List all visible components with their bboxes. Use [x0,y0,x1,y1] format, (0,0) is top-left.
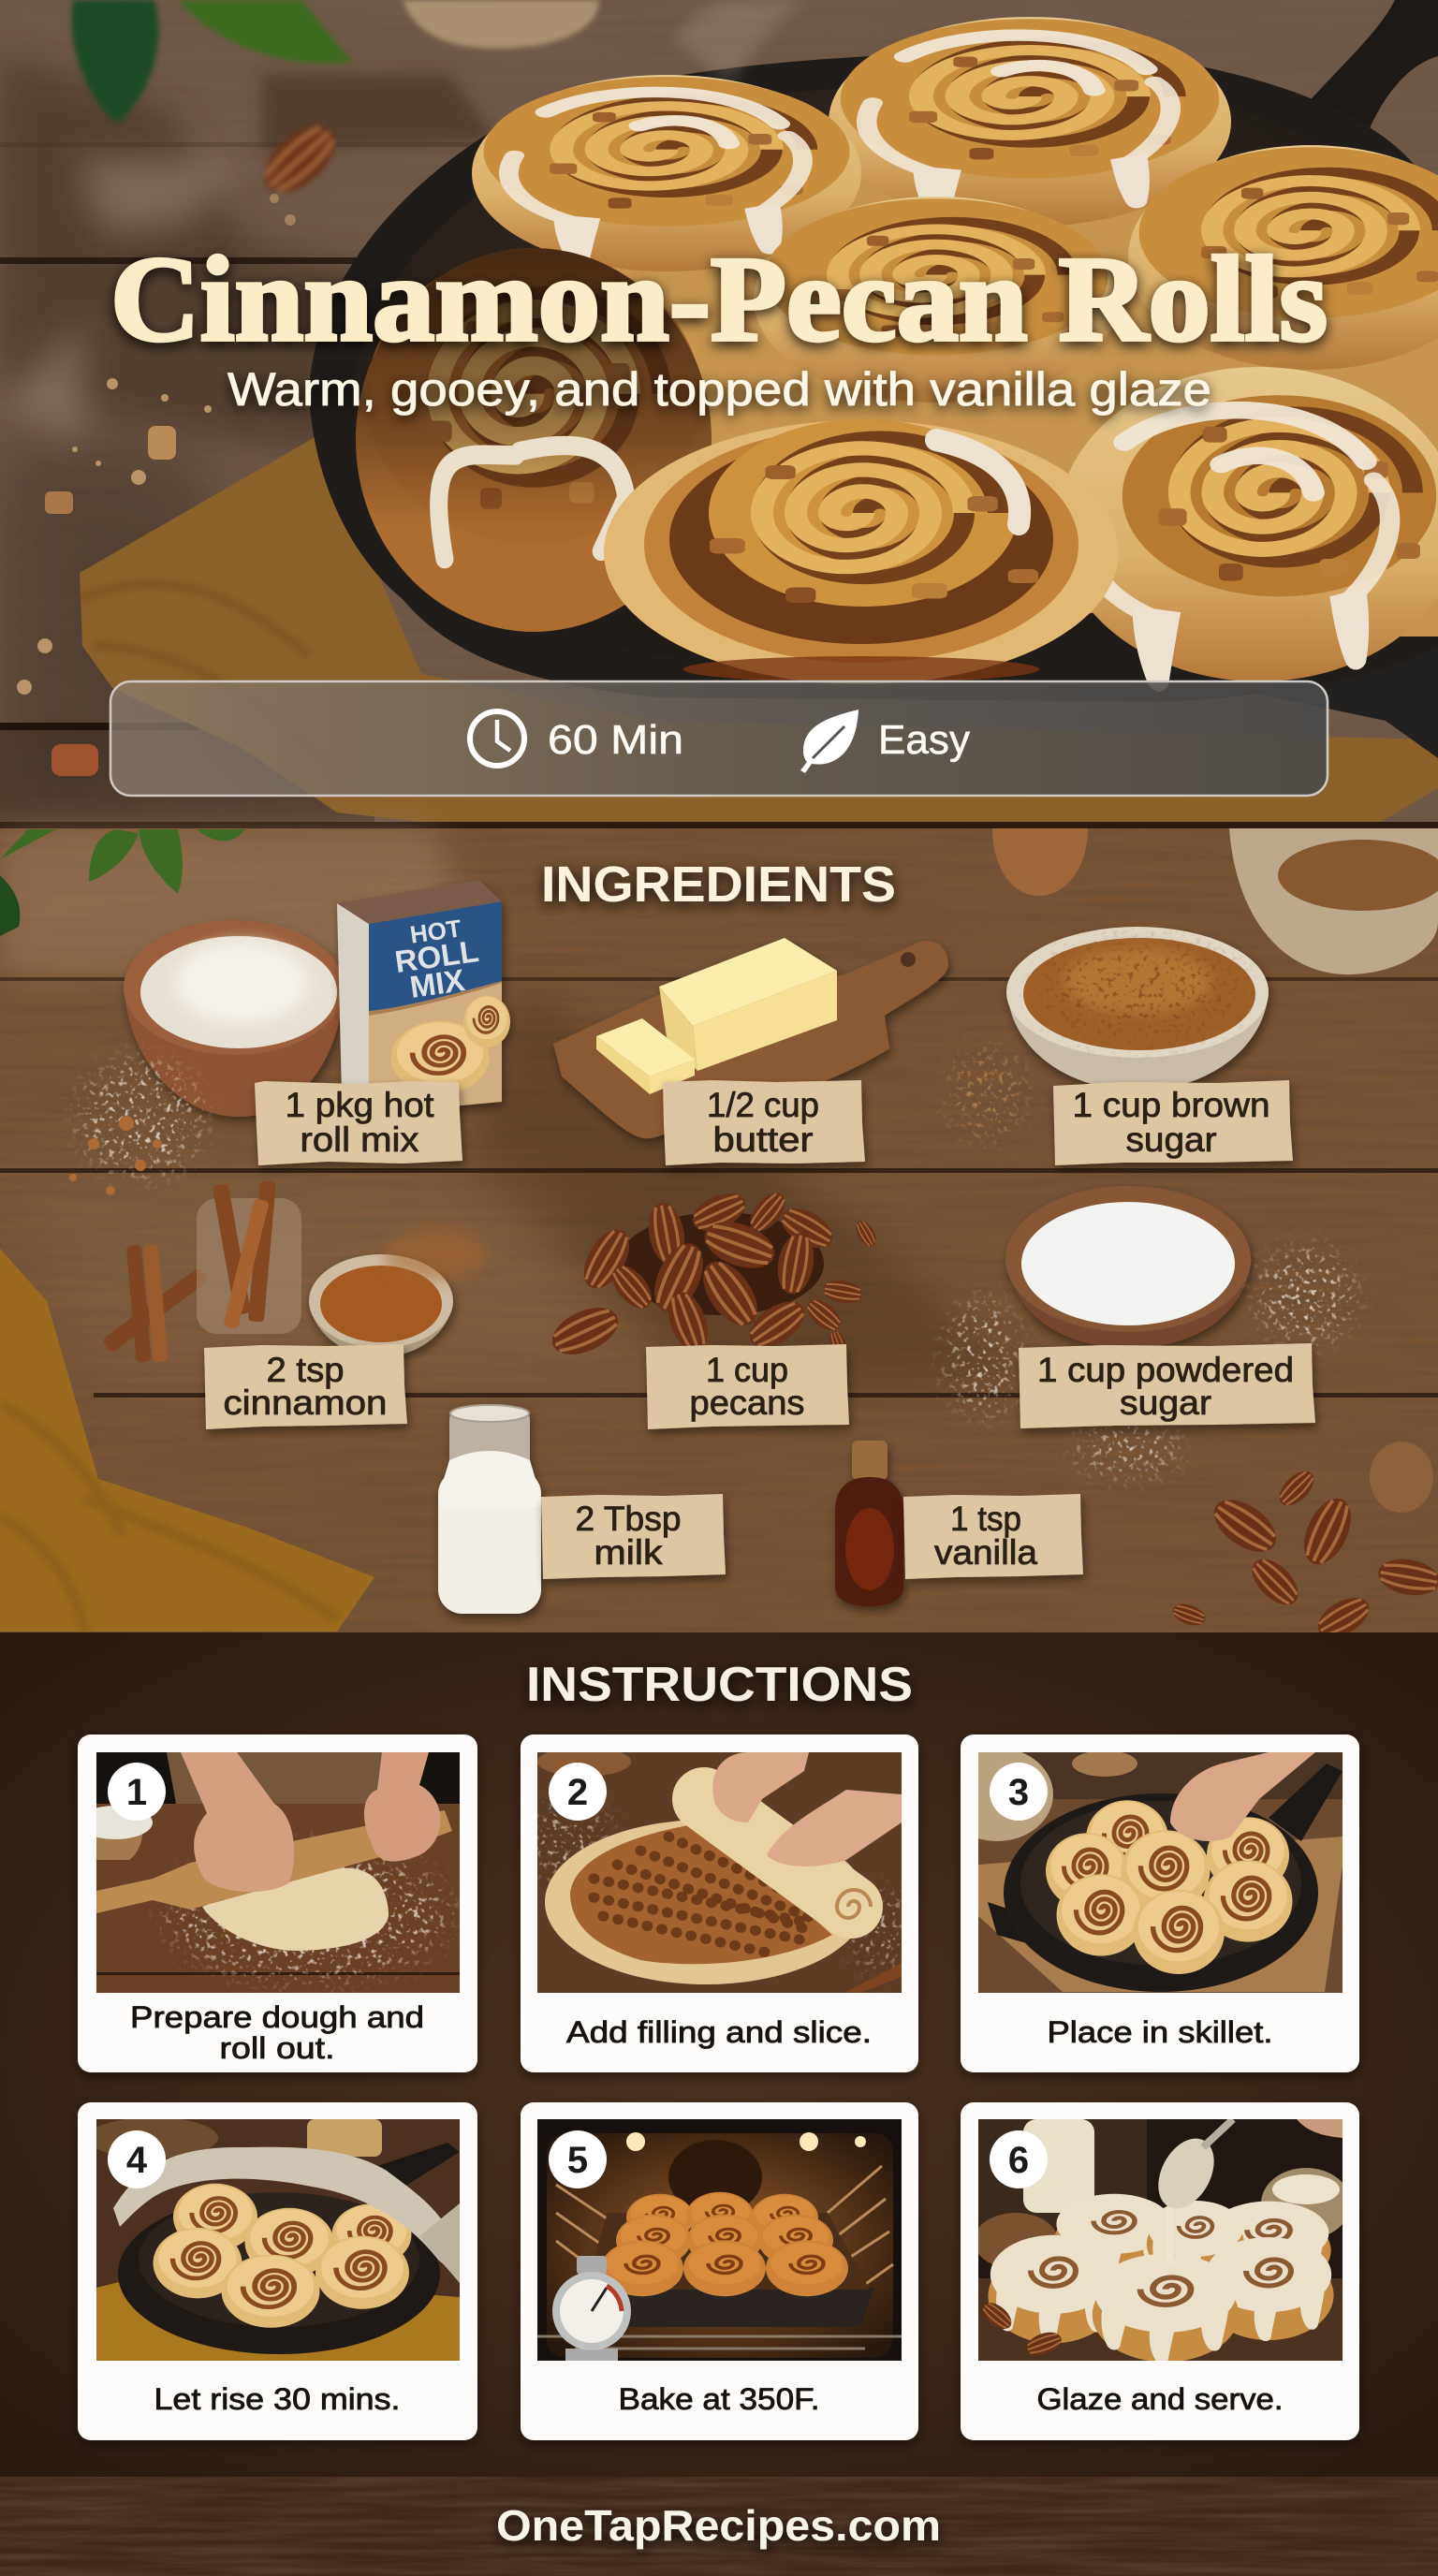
step 4 image [96,2119,460,2361]
step 5 card [521,2102,918,2440]
box text: ROLL [392,933,481,979]
roll: right bottom [1058,367,1438,692]
roll: upper right [1128,145,1438,370]
icon: green leaves [71,0,352,124]
brown sugar scatter [948,1048,1027,1142]
ingredients wood background [0,828,1438,1633]
ingredient: cinnamon [101,1181,487,1363]
hero wood table background [0,0,1438,824]
step 6 card [961,2102,1359,2440]
cinnamon jar [197,1181,301,1334]
icon: pecan on table [252,113,347,205]
step 4 number: 4 [126,2140,148,2181]
label: roll mix: roll mix [300,1120,419,1159]
label: pecans: 1 cup [706,1351,788,1389]
step 2 number: 2 [567,1772,588,1813]
label: butter [663,1080,865,1165]
label: butter: butter [713,1120,813,1159]
footer wood band [0,2477,1438,2576]
title: Cinnamon-Pecan Rolls [110,232,1328,367]
step 6 caption: Glaze and serve. [1037,2382,1283,2416]
box text: MIX [407,962,467,1004]
label: butter: 1/2 cup [707,1086,819,1124]
label: roll mix: 1 pkg hot [285,1086,434,1124]
step 5 number: 5 [567,2140,588,2181]
ingredient: hot roll mix box [337,880,510,1114]
step 2 caption: Add filling and slice. [566,2015,872,2049]
step 6 number: 6 [1008,2140,1029,2181]
label: powdered sugar: 1 cup powdered [1037,1351,1294,1389]
step 1 number [108,1763,166,1821]
cinnamon rolls in skillet [356,17,1438,692]
subtitle: Warm, gooey, and topped with vanilla glaze [227,363,1211,416]
step 3 image [978,1752,1343,1993]
oven thermometer [552,2256,631,2361]
section heading: INSTRUCTIONS [526,1658,913,1712]
time label: 60 Min [548,717,683,763]
step 1 caption: Prepare dough and [130,2000,424,2034]
step 6 number [990,2130,1048,2188]
website: OneTapRecipes.com [496,2501,941,2550]
flour dust [80,1062,201,1175]
crumbs left [69,1116,162,1195]
label: roll mix [255,1081,462,1165]
panel: hero [0,0,1438,824]
step 3 caption: Place in skillet. [1047,2015,1273,2049]
panel: instructions [0,1632,1438,2477]
step 1 number: 1 [126,1772,147,1813]
step 2 number [549,1763,607,1821]
ingredient: butter on board [553,938,948,1138]
roll: center [754,197,1119,402]
crumbs [17,194,296,776]
step 5 number [549,2130,607,2188]
ingredient: milk bottle [438,1405,541,1614]
ingredient: powdered sugar bowl [1005,1186,1252,1348]
step 1 card [78,1734,477,2072]
decor: wooden pepper mill [992,828,1088,896]
napkin [80,435,1438,824]
label: milk [541,1494,726,1579]
label: powdered sugar: sugar [1120,1383,1211,1422]
section heading: INGREDIENTS [541,856,896,913]
label: vanilla [903,1494,1083,1579]
label: cinnamon: cinnamon [223,1383,388,1422]
badge: time and difficulty [110,681,1328,796]
step 3 card [941,1734,1359,2072]
icon: clock [470,711,524,766]
step 5 caption: Bake at 350F. [618,2382,820,2416]
background cup [403,0,599,49]
step 1 image [96,1752,460,1993]
skillet [309,0,1438,758]
cinnamon powder bowl [309,1254,453,1357]
sugar dust [949,1250,1353,1473]
step 4 number [108,2130,166,2188]
label: brown sugar: 1 cup brown [1073,1086,1269,1124]
step 1 caption: roll out. [219,2031,335,2065]
step 4 caption: Let rise 30 mins. [154,2382,401,2416]
step 3 number [990,1763,1048,1821]
difficulty label: Easy [878,717,970,763]
step 3 number: 3 [1008,1772,1029,1813]
label: cinnamon [204,1344,407,1429]
label: vanilla: vanilla [934,1533,1037,1572]
label: powdered sugar [1019,1343,1315,1428]
step 2 card [521,1734,918,2072]
box text: HOT [408,914,463,949]
cloth left [0,1249,374,1632]
roll: upper left [472,75,861,271]
cinnamon sticks [101,1244,209,1363]
label: brown sugar: sugar [1125,1120,1217,1159]
ingredient: vanilla bottle [835,1441,903,1606]
label: vanilla: 1 tsp [950,1500,1021,1538]
step 4 card [78,2102,477,2440]
label: milk: 2 Tbsp [575,1500,682,1538]
decor: plant leaves [0,829,245,936]
step 5 image [537,2119,902,2361]
step 6 image [978,2119,1343,2361]
roll: left [356,248,712,632]
label: cinnamon: 2 tsp [266,1351,345,1389]
nuts lower right [1170,1442,1438,1646]
steam [674,0,805,84]
label: brown sugar [1053,1080,1293,1165]
roll: top [829,17,1231,227]
ingredient: flour bowl [124,920,345,1117]
label: pecans [646,1344,849,1429]
panel: ingredients [0,828,1438,1646]
step 2 image [537,1752,902,1993]
decor: bowl top right [1229,828,1438,974]
roll: bottom center [604,419,1119,684]
icon: leaf [800,710,858,773]
instructions background [0,1632,1438,2477]
label: milk: milk [594,1533,663,1572]
ingredient: pecans [545,1186,880,1364]
box text [392,914,481,1004]
panel: footer [0,2477,1438,2576]
label: pecans: pecans [689,1383,805,1422]
ingredient: brown sugar bowl [1006,927,1269,1090]
step 1 caption [130,2000,424,2065]
